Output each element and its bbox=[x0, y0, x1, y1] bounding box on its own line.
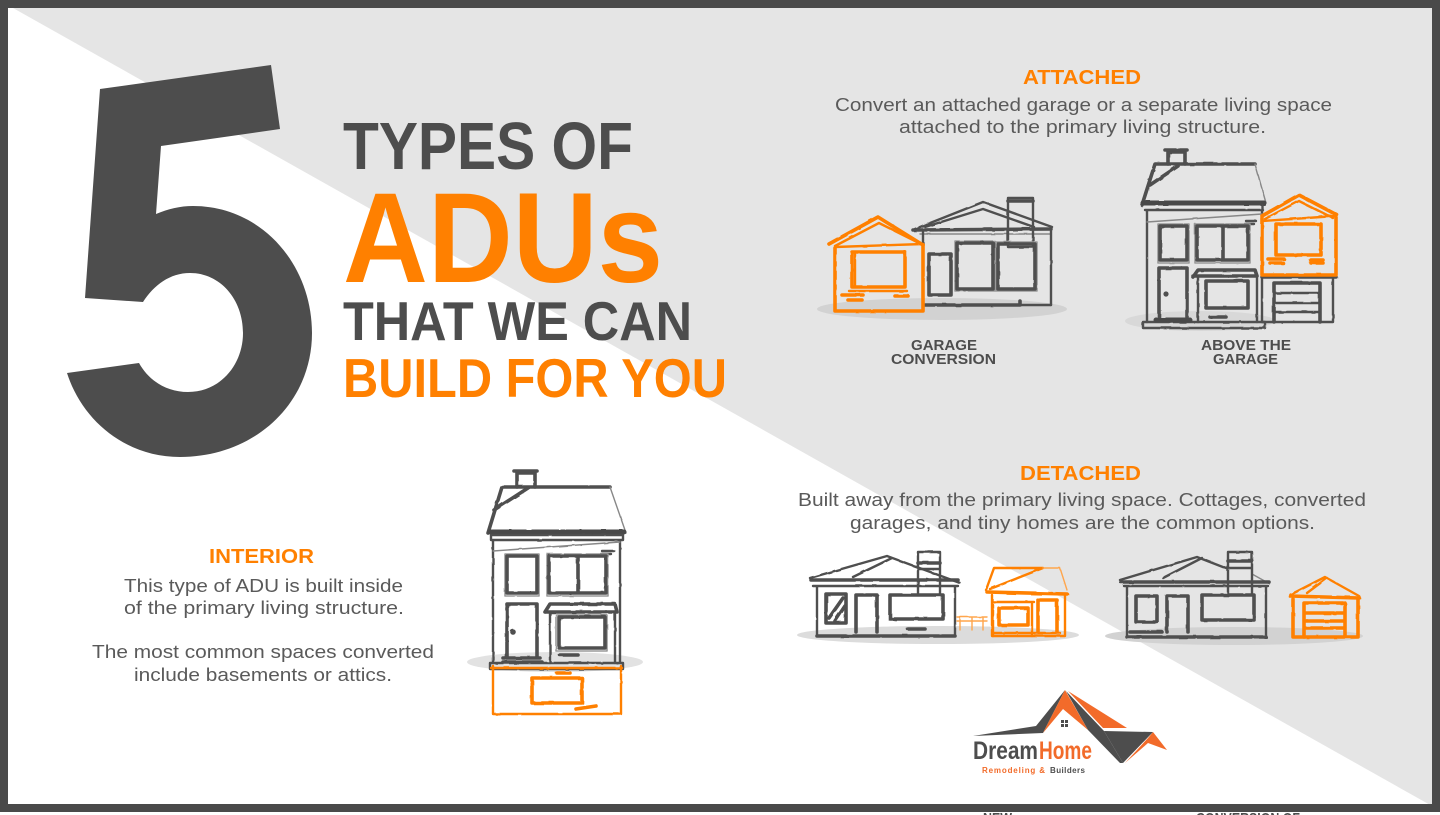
title: BUILD FOR YOU bbox=[343, 347, 727, 409]
interior text block: INTERIOR bbox=[209, 546, 315, 568]
illustration: detached garage bbox=[1105, 552, 1363, 645]
logo name: Dream bbox=[973, 737, 1038, 765]
interior text block: This type of ADU is built inside bbox=[124, 575, 403, 596]
detached text block bbox=[798, 463, 1366, 533]
orange garage bbox=[829, 217, 923, 311]
logo tagline bbox=[982, 766, 1086, 775]
logo tagline: Remodeling & bbox=[982, 766, 1045, 775]
grey house bbox=[488, 471, 626, 669]
ground shadow bbox=[817, 298, 1067, 320]
logo left roof bbox=[973, 690, 1065, 736]
illustration: interior basement bbox=[467, 471, 643, 714]
logo tagline: Builders bbox=[1050, 766, 1086, 775]
illustration: detached cottage bbox=[797, 552, 1079, 644]
ground shadow bbox=[797, 626, 1079, 644]
title: THAT WE CAN bbox=[343, 290, 692, 352]
label: above the garage: GARAGE bbox=[1213, 352, 1278, 368]
grey house bbox=[1120, 552, 1270, 637]
orange addition bbox=[1262, 195, 1337, 275]
label: garage conversion: GARAGE bbox=[911, 338, 977, 354]
logo orange slope bbox=[1043, 690, 1088, 733]
logo window bbox=[1061, 720, 1068, 727]
detached text block: DETACHED bbox=[1020, 463, 1141, 485]
illustration: above the garage bbox=[1125, 150, 1337, 331]
grey garage bbox=[1262, 275, 1336, 279]
detached text block: garages, and tiny homes are the common options. bbox=[850, 512, 1315, 533]
title bbox=[343, 109, 727, 409]
big number 5 bbox=[67, 65, 312, 457]
grey house bbox=[810, 552, 960, 636]
orange cottage bbox=[957, 568, 1067, 636]
interior text block: include basements or attics. bbox=[134, 664, 392, 685]
interior text block: of the primary living structure. bbox=[124, 597, 404, 618]
logo orange ridge bbox=[1068, 691, 1127, 728]
ground shadow bbox=[1125, 311, 1275, 331]
label: above the garage bbox=[1201, 338, 1291, 368]
attached text block: attached to the primary living structure. bbox=[899, 116, 1266, 137]
orange garage bbox=[1290, 577, 1359, 637]
attached text block: ATTACHED bbox=[1023, 67, 1141, 89]
attached text block bbox=[835, 67, 1332, 137]
grey house bbox=[913, 198, 1052, 305]
interior text block: The most common spaces converted bbox=[92, 641, 434, 662]
attached text block: Convert an attached garage or a separate living space bbox=[835, 94, 1332, 115]
logo name: Home bbox=[1039, 737, 1092, 765]
logo name bbox=[973, 737, 1092, 765]
ground shadow bbox=[1105, 627, 1363, 645]
title: ADUs bbox=[343, 167, 663, 310]
illustration: garage conversion bbox=[817, 198, 1067, 320]
logo diagonal bbox=[1066, 691, 1123, 763]
label: garage conversion bbox=[891, 338, 996, 368]
label: above the garage: ABOVE THE bbox=[1201, 338, 1291, 354]
logo right roof bbox=[1104, 731, 1153, 763]
label: garage conversion: CONVERSION bbox=[891, 352, 996, 368]
logo: DreamHome bbox=[973, 690, 1167, 775]
title: TYPES OF bbox=[343, 109, 633, 184]
detached text block: Built away from the primary living space. Cottages, converted bbox=[798, 489, 1366, 510]
orange basement bbox=[491, 666, 622, 714]
interior text block bbox=[92, 546, 434, 685]
grey house bbox=[1142, 150, 1336, 328]
clipped footer labels bbox=[983, 811, 1300, 815]
ground shadow bbox=[467, 652, 643, 672]
logo right tip bbox=[1125, 732, 1167, 763]
